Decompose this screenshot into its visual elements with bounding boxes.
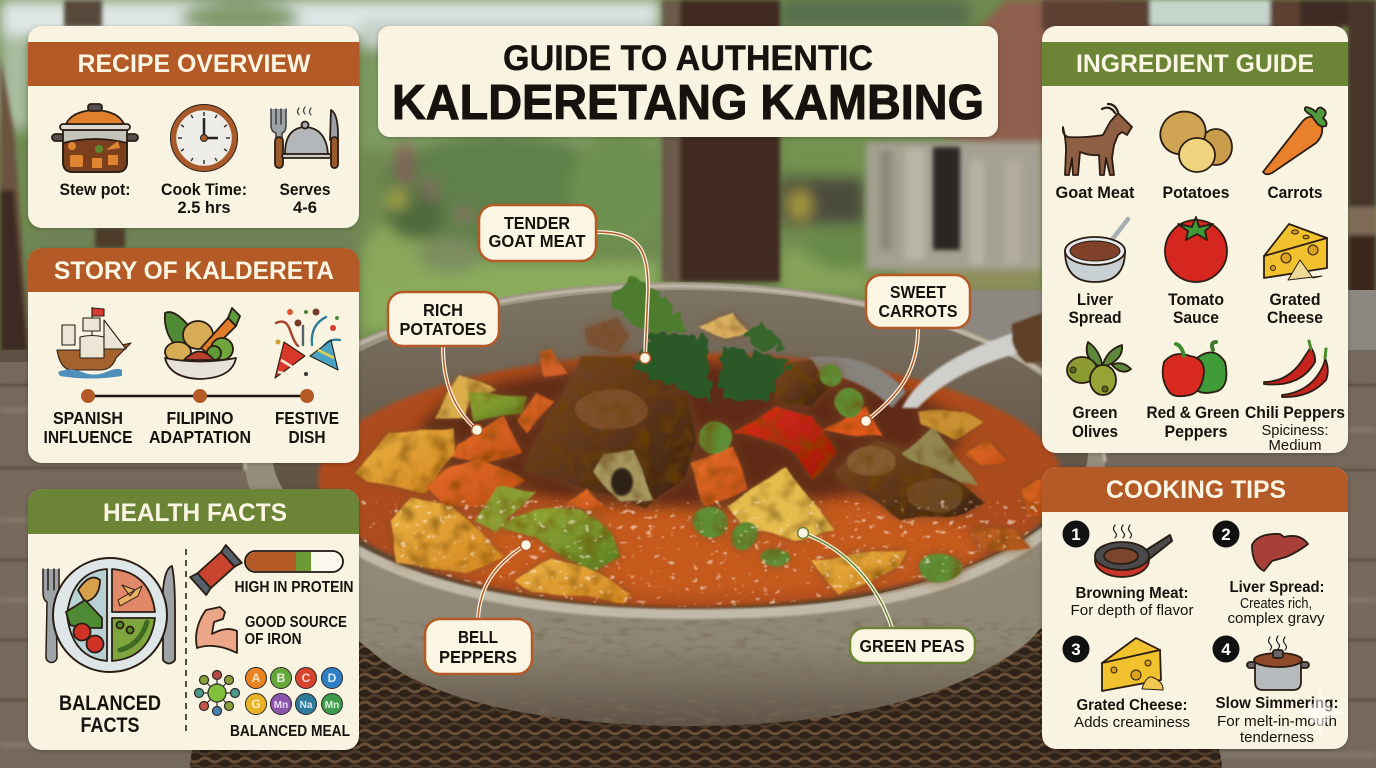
title banner: KALDERETANG KAMBING (392, 76, 984, 130)
tip text: slow simmering: Slow Simmering: (1216, 695, 1338, 712)
callout: sweet carrots: CARROTS (878, 301, 958, 321)
label: spanish influence (44, 408, 132, 447)
callout: bell peppers (425, 540, 532, 674)
callout: green peas (798, 528, 975, 663)
step number 1 (1062, 520, 1090, 548)
timeline (81, 389, 314, 403)
vitamin and mineral badges: B (277, 671, 286, 685)
label: filipino adaptation: ADAPTATION (149, 427, 251, 447)
label: green olives (1072, 404, 1118, 441)
callout: rich potatoes: POTATOES (400, 319, 486, 339)
icon: spanish ship (57, 307, 131, 378)
peas (695, 364, 962, 581)
vitamin and mineral badges (246, 668, 342, 714)
icon: carrot (1263, 107, 1327, 174)
label: balanced facts (59, 692, 161, 737)
tip text: grated cheese: Adds creaminess (1074, 715, 1190, 731)
label: filipino adaptation (149, 408, 251, 447)
callout: rich potatoes (388, 292, 499, 436)
callout: bell peppers: BELL (458, 627, 498, 647)
label: festive dish (275, 408, 339, 447)
tip text: slow simmering: For melt-in-mouth (1217, 714, 1337, 730)
watermark sparkle (1297, 688, 1344, 738)
label: cook time: Cook Time: (161, 181, 247, 199)
vitamin and mineral badges: Mn (325, 700, 339, 711)
label: grated cheese: Cheese (1267, 309, 1323, 327)
step number 1: 1 (1071, 525, 1081, 544)
heading: cooking tips: COOKING TIPS (1106, 476, 1286, 504)
callout: sweet carrots (860, 275, 970, 426)
divider (185, 549, 187, 733)
label: stew pot: Stew pot: (60, 181, 130, 199)
icon: flexed arm (196, 607, 237, 653)
vitamin and mineral badges: C (302, 671, 311, 685)
label: good source of iron: GOOD SOURCE (245, 614, 347, 631)
vitamin and mineral badges: Na (300, 700, 313, 711)
label: liver spread (1068, 291, 1122, 327)
tip text: grated cheese: Grated Cheese: (1076, 697, 1188, 714)
label: red and green peppers: Red & Green (1146, 404, 1240, 422)
photo: stew bowl (245, 277, 1105, 726)
title banner (378, 26, 998, 137)
bones (594, 450, 652, 503)
icon: bell peppers (1163, 342, 1226, 396)
tip text: liver spread (1228, 579, 1325, 627)
heading: story of kaldereta: STORY OF KALDERETA (54, 257, 334, 285)
bowl rim and interior (245, 282, 1105, 642)
tip text: liver spread: complex gravy (1228, 611, 1325, 627)
icon: clock (170, 104, 238, 172)
bone marrow (611, 468, 633, 496)
label: serves: Serves (280, 181, 330, 199)
icon: cheese wedge (1102, 638, 1163, 691)
step number 2: 2 (1221, 525, 1231, 544)
protein progress pill (245, 551, 343, 572)
label: red and green peppers: Peppers (1164, 423, 1228, 441)
icon: fork, cloche and knife (271, 107, 338, 168)
icon: green olives (1067, 342, 1131, 395)
icon: frying pan (1095, 525, 1172, 577)
bowl body (245, 470, 1105, 726)
woven mat (190, 618, 1222, 768)
label: cook time (161, 181, 247, 217)
label: red and green peppers (1146, 404, 1240, 441)
icon: protein bar (190, 545, 242, 595)
callout: tender goat meat (479, 205, 650, 364)
sauce highlights (360, 500, 1042, 607)
panel: story of kaldereta (28, 248, 359, 463)
icon: molecule (194, 670, 240, 716)
label: cook time: 2.5 hrs (178, 199, 230, 217)
heading: health facts: HEALTH FACTS (103, 499, 287, 527)
icon: party confetti (275, 308, 340, 378)
step number 4: 4 (1221, 640, 1231, 659)
potatoes (356, 428, 454, 493)
panel: health facts (28, 489, 359, 750)
tip text: browning meat: Browning Meat: (1076, 585, 1188, 602)
icon: potatoes (1153, 104, 1232, 172)
callout: tender goat meat: TENDER (504, 213, 570, 233)
icon: liver (1252, 534, 1308, 571)
label: tomato sauce (1168, 291, 1224, 327)
heading: recipe overview: RECIPE OVERVIEW (78, 50, 311, 78)
label: spanish influence: INFLUENCE (44, 427, 132, 447)
vitamin and mineral badges: G (251, 697, 261, 711)
icon: simmering pot (1247, 636, 1309, 690)
label: high in protein: HIGH IN PROTEIN (234, 579, 354, 596)
panel: ingredient guide (1042, 26, 1348, 454)
title banner: GUIDE TO AUTHENTIC (503, 39, 873, 78)
tip text: liver spread: Creates rich, (1240, 596, 1312, 612)
tip text: slow simmering (1216, 695, 1338, 746)
callout: bell peppers: PEPPERS (439, 647, 517, 667)
label: good source of iron (244, 614, 347, 648)
label: chili peppers with spiciness: Spiciness: (1262, 423, 1328, 439)
front lip of the bowl (296, 505, 1076, 614)
bell peppers (733, 407, 838, 480)
label: carrots: Carrots (1268, 184, 1322, 202)
label: chili peppers with spiciness (1245, 404, 1345, 454)
icon: tomato (1165, 217, 1227, 282)
step number 4 (1212, 636, 1240, 662)
label: balanced facts: FACTS (80, 714, 140, 737)
label: festive dish: DISH (288, 427, 326, 447)
cilantro garnish (612, 277, 791, 403)
icon: stew pot (52, 104, 138, 172)
step number 2 (1212, 520, 1240, 548)
panel: recipe overview (28, 26, 359, 228)
label: balanced meal: BALANCED MEAL (230, 723, 350, 740)
callout: sweet carrots: SWEET (890, 282, 946, 302)
pale edge along the back rim (245, 286, 1105, 470)
label: tomato sauce: Tomato (1168, 291, 1224, 309)
label: festive dish: FESTIVE (275, 408, 339, 428)
tip text: browning meat (1070, 585, 1194, 619)
label: green olives: Olives (1072, 423, 1118, 441)
icon: wedge of cheese (1264, 224, 1327, 280)
label: good source of iron: OF IRON (244, 631, 302, 648)
meat (523, 357, 697, 507)
tip text: browning meat: For depth of flavor (1070, 603, 1194, 619)
spoon (809, 313, 1042, 408)
label: serves: 4-6 (293, 199, 317, 217)
label: liver spread: Liver (1077, 291, 1114, 309)
label: green olives: Green (1072, 404, 1118, 422)
stew ingredients (356, 313, 1044, 602)
panel: cooking tips (1042, 467, 1348, 749)
tip text: liver spread: Liver Spread: (1230, 579, 1324, 596)
step number 3 (1062, 636, 1090, 662)
label: chili peppers with spiciness: Chili Peppers (1245, 404, 1345, 422)
icon: goat (1063, 104, 1132, 175)
label: spanish influence: SPANISH (53, 408, 123, 428)
label: chili peppers with spiciness: Medium (1268, 438, 1322, 454)
tip text: slow simmering: tenderness (1240, 730, 1314, 746)
carrots (452, 417, 523, 462)
icon: chili peppers (1264, 341, 1328, 397)
label: grated cheese (1267, 291, 1323, 327)
callout: tender goat meat: GOAT MEAT (488, 231, 586, 251)
vitamin and mineral badges: A (252, 671, 261, 685)
stew sauce (318, 353, 1062, 607)
tip text: grated cheese (1074, 697, 1190, 731)
icon: vegetable bowl (165, 308, 240, 379)
speckled glaze on the bowl (330, 618, 1050, 726)
step number 3: 3 (1071, 640, 1081, 659)
label: liver spread: Spread (1068, 309, 1122, 327)
heading: ingredient guide: INGREDIENT GUIDE (1076, 50, 1314, 78)
callout: rich potatoes: RICH (423, 300, 463, 320)
icon: balanced plate (43, 558, 175, 672)
label: potatoes: Potatoes (1162, 184, 1230, 202)
label: balanced facts: BALANCED (59, 692, 161, 715)
icon: liver spread bowl (1065, 219, 1128, 282)
label: grated cheese: Grated (1270, 291, 1320, 309)
label: goat meat: Goat Meat (1056, 184, 1135, 202)
vitamin and mineral badges: D (328, 671, 337, 685)
label: filipino adaptation: FILIPINO (166, 408, 234, 428)
callout: green peas: GREEN PEAS (860, 636, 964, 656)
vitamin and mineral badges: Mn (274, 700, 288, 711)
label: tomato sauce: Sauce (1173, 309, 1219, 327)
label: serves (280, 181, 330, 217)
